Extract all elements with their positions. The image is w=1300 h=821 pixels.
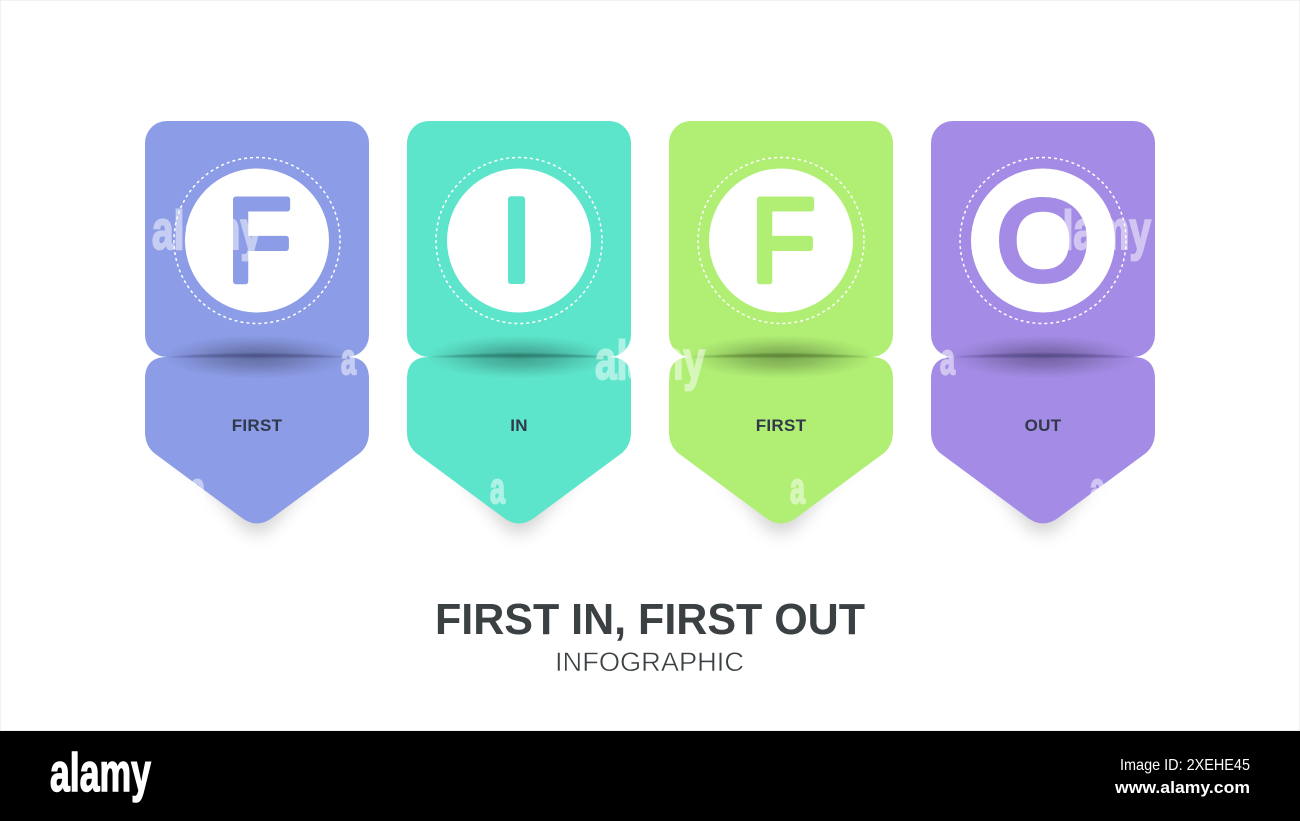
lower arrow tab: First: FIRST [232,416,283,435]
lower arrow tab: In: IN [510,416,528,435]
fold shadow: First (second) [687,335,875,379]
lower arrow tab: First (second): FIRST [756,416,807,435]
letter badge: F (second): F [751,173,816,306]
letter badge: O: O [996,177,1090,304]
watermark overlay: a [1090,464,1105,513]
panel: I for In [407,121,631,534]
upper card: First (second) [669,121,893,357]
lower arrow tab: Out: OUT [1025,416,1062,435]
letter badge: F: F [227,173,292,306]
panel: F for First (second) [669,121,893,534]
watermark overlay: alamy [152,199,262,261]
letter badge: I [436,158,602,324]
upper card: Out [931,121,1155,357]
title: FIRST IN, FIRST OUT [435,595,865,644]
watermark overlay: a [341,335,356,384]
lower arrow tab: In [407,357,631,524]
footer logo: alamy [50,743,151,803]
upper card: First [145,121,369,357]
watermark overlay: a [940,335,955,384]
panel: O for Out [931,121,1155,534]
subtitle: INFOGRAPHIC [555,647,744,677]
watermark overlay: alamy [1041,199,1151,261]
watermark overlay: a [190,464,205,513]
watermark overlay: a [790,464,805,513]
upper card: In [407,121,631,357]
letter badge: I: I [500,174,533,307]
watermark overlay: alamy [595,329,705,391]
lower arrow tab: Out [931,357,1155,524]
letter badge: F [174,158,340,324]
watermark overlay [152,199,1151,513]
letter badge: F (second) [698,158,864,324]
letter badge: O [960,158,1126,324]
watermark overlay: a [490,464,505,513]
panel: F for First [145,121,369,534]
fold shadow: First [163,335,351,379]
footer band [0,731,1300,821]
fold shadow: In [425,335,613,379]
lower arrow tab: First [145,357,369,524]
website: www.alamy.com [1114,778,1250,797]
fold shadow: Out [949,335,1137,379]
image id: Image ID: 2XEHE45 [1120,757,1250,774]
lower arrow tab: First (second) [669,357,893,524]
